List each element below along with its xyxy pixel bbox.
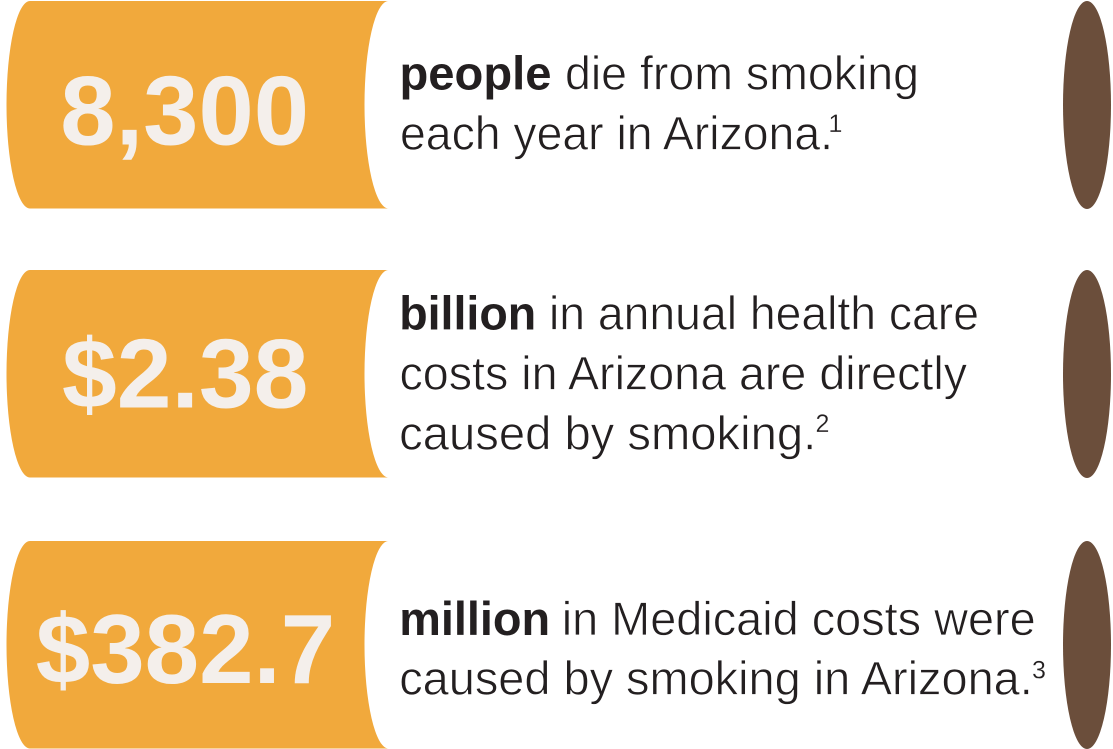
cylinder end: Medicaid costs: [1063, 541, 1111, 749]
cylinder end: health care costs: [1063, 270, 1111, 478]
description: deaths: die from smoking: [565, 47, 919, 100]
description: health care costs: 2: [816, 410, 829, 438]
description: deaths: each year in Arizona.: [400, 107, 833, 160]
description: Medicaid costs: [399, 592, 1046, 704]
cylinder body: deaths: [6, 1, 388, 208]
description: health care costs: costs in Arizona are directly: [400, 346, 967, 400]
description: Medicaid costs: in Medicaid costs were: [562, 592, 1036, 645]
description: health care costs: billion: [399, 287, 536, 340]
description: health care costs: caused by smoking.: [399, 406, 816, 459]
description: deaths: [400, 47, 919, 160]
panel: health care costs statistic: [6, 270, 1111, 478]
description: deaths: 1: [828, 110, 842, 138]
description: Medicaid costs: million: [399, 592, 550, 645]
description: Medicaid costs: caused by smoking in Arizona.: [399, 652, 1033, 704]
description: deaths: people: [400, 47, 552, 100]
cylinder end: deaths: [1063, 1, 1111, 209]
number: $2.38: $2.38: [62, 319, 308, 429]
cylinder body: Medicaid costs: [6, 541, 388, 748]
description: Medicaid costs: 3: [1032, 656, 1046, 684]
panel: Medicaid costs statistic: [6, 541, 1111, 749]
cylinder body: health care costs: [6, 270, 388, 478]
description: health care costs: [399, 287, 979, 459]
panel: deaths statistic: [6, 1, 1111, 209]
number: $382.7: $382.7: [36, 594, 335, 704]
number: 8,300: 8,300: [60, 56, 309, 166]
description: health care costs: in annual health care: [549, 287, 979, 340]
